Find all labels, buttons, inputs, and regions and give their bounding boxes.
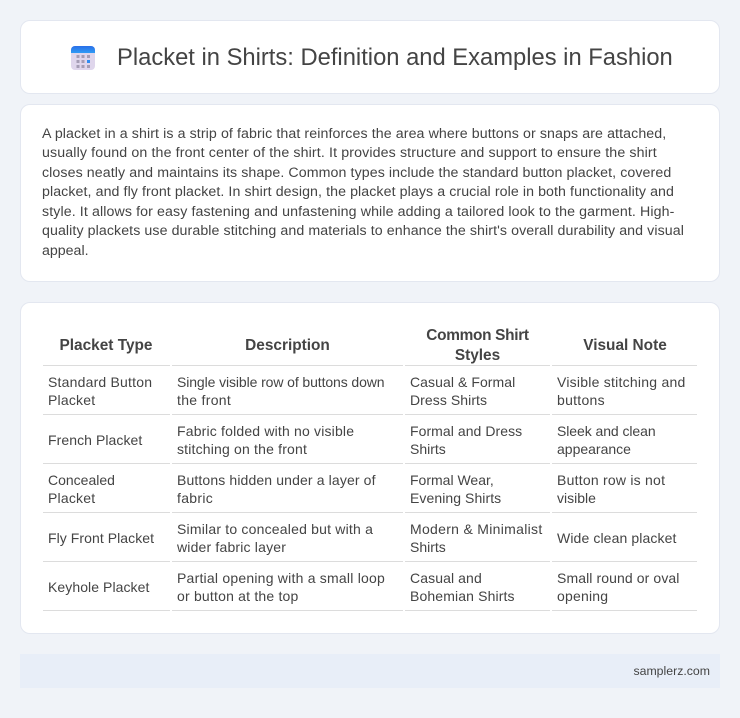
row: concealed placket: Buttons hidden under a layer of (177, 472, 376, 488)
row: fly front placket: Similar to concealed but with a (177, 521, 373, 537)
row: standard button placket: Placket (48, 392, 95, 408)
footer credit: samplerz.com (633, 664, 710, 678)
row: concealed placket: Evening Shirts (410, 490, 501, 506)
row: keyhole placket: or button at the top (177, 588, 299, 604)
row: fly front placket: wider fabric layer (177, 539, 286, 555)
row: concealed placket: Concealed (48, 472, 115, 488)
row: fly front placket: Fly Front Placket (48, 530, 154, 546)
row: keyhole placket: Casual and (410, 570, 482, 586)
row: french placket: Formal and Dress (410, 423, 522, 439)
row: french placket: stitching on the front (177, 441, 307, 457)
row: fly front placket (48, 521, 676, 555)
header panel (20, 20, 720, 94)
definition paragraph: appeal. (42, 243, 89, 259)
row: keyhole placket: Small round or oval (557, 570, 680, 586)
definition paragraph (42, 126, 684, 259)
table header: Description (245, 337, 330, 354)
panel: placket table (20, 302, 720, 634)
row: standard button placket: Standard Button (48, 374, 152, 390)
row: standard button placket: Dress Shirts (410, 392, 487, 408)
row: fly front placket: Modern & Minimalist (410, 521, 543, 537)
row: keyhole placket: Partial opening with a small loop (177, 570, 385, 586)
row: standard button placket: the front (177, 392, 231, 408)
definition paragraph: A placket in a shirt is a strip of fabric that reinforces the area where buttons or snaps are attached, (42, 126, 666, 142)
table header: Styles (455, 347, 500, 364)
panel: definition text (20, 104, 720, 282)
row: concealed placket: fabric (177, 490, 213, 506)
row: french placket (48, 423, 656, 457)
row: standard button placket: Casual & Formal (410, 374, 515, 390)
row: keyhole placket: Bohemian Shirts (410, 588, 515, 604)
row: french placket: appearance (557, 441, 631, 457)
footer bar (20, 654, 720, 688)
row: fly front placket: Wide clean placket (557, 530, 676, 546)
icon: calendar (71, 46, 95, 70)
definition paragraph: closes neatly and maintains its shape. Common types include the standard button placket, covered (42, 165, 671, 181)
row: standard button placket (48, 374, 686, 408)
row: concealed placket: Placket (48, 490, 95, 506)
table header (60, 327, 667, 364)
definition paragraph: quality plackets use durable stitching and materials to enhance the shirt's overall durability and visual (42, 223, 684, 239)
row: standard button placket: buttons (557, 392, 605, 408)
table header: Visual Note (583, 337, 667, 354)
title: Placket in Shirts: Definition and Examples in Fashion (117, 44, 673, 71)
row: concealed placket: visible (557, 490, 596, 506)
row: french placket: French Placket (48, 432, 142, 448)
definition paragraph: style. It allows for easy fastening and unfastening while adding a tailored look to the garment. High- (42, 204, 674, 220)
row: concealed placket: Button row is not (557, 472, 665, 488)
row: standard button placket: Visible stitching and (557, 374, 686, 390)
row: keyhole placket (48, 570, 680, 604)
row: fly front placket: Shirts (410, 539, 446, 555)
definition paragraph: usually found on the front center of the shirt. It provides structure and support to ensure the shirt (42, 145, 657, 161)
row: keyhole placket: Keyhole Placket (48, 579, 149, 595)
table header: Common Shirt (426, 327, 529, 344)
row: standard button placket: Single visible row of buttons down (177, 374, 384, 390)
row: french placket: Shirts (410, 441, 446, 457)
row: concealed placket (48, 472, 665, 506)
row: french placket: Sleek and clean (557, 423, 656, 439)
definition paragraph: placket, and fly front placket. In shirt design, the placket plays a crucial role in both functionality and (42, 184, 674, 200)
row: concealed placket: Formal Wear, (410, 472, 494, 488)
row: french placket: Fabric folded with no visible (177, 423, 354, 439)
row: keyhole placket: opening (557, 588, 608, 604)
table header: Placket Type (60, 337, 152, 354)
